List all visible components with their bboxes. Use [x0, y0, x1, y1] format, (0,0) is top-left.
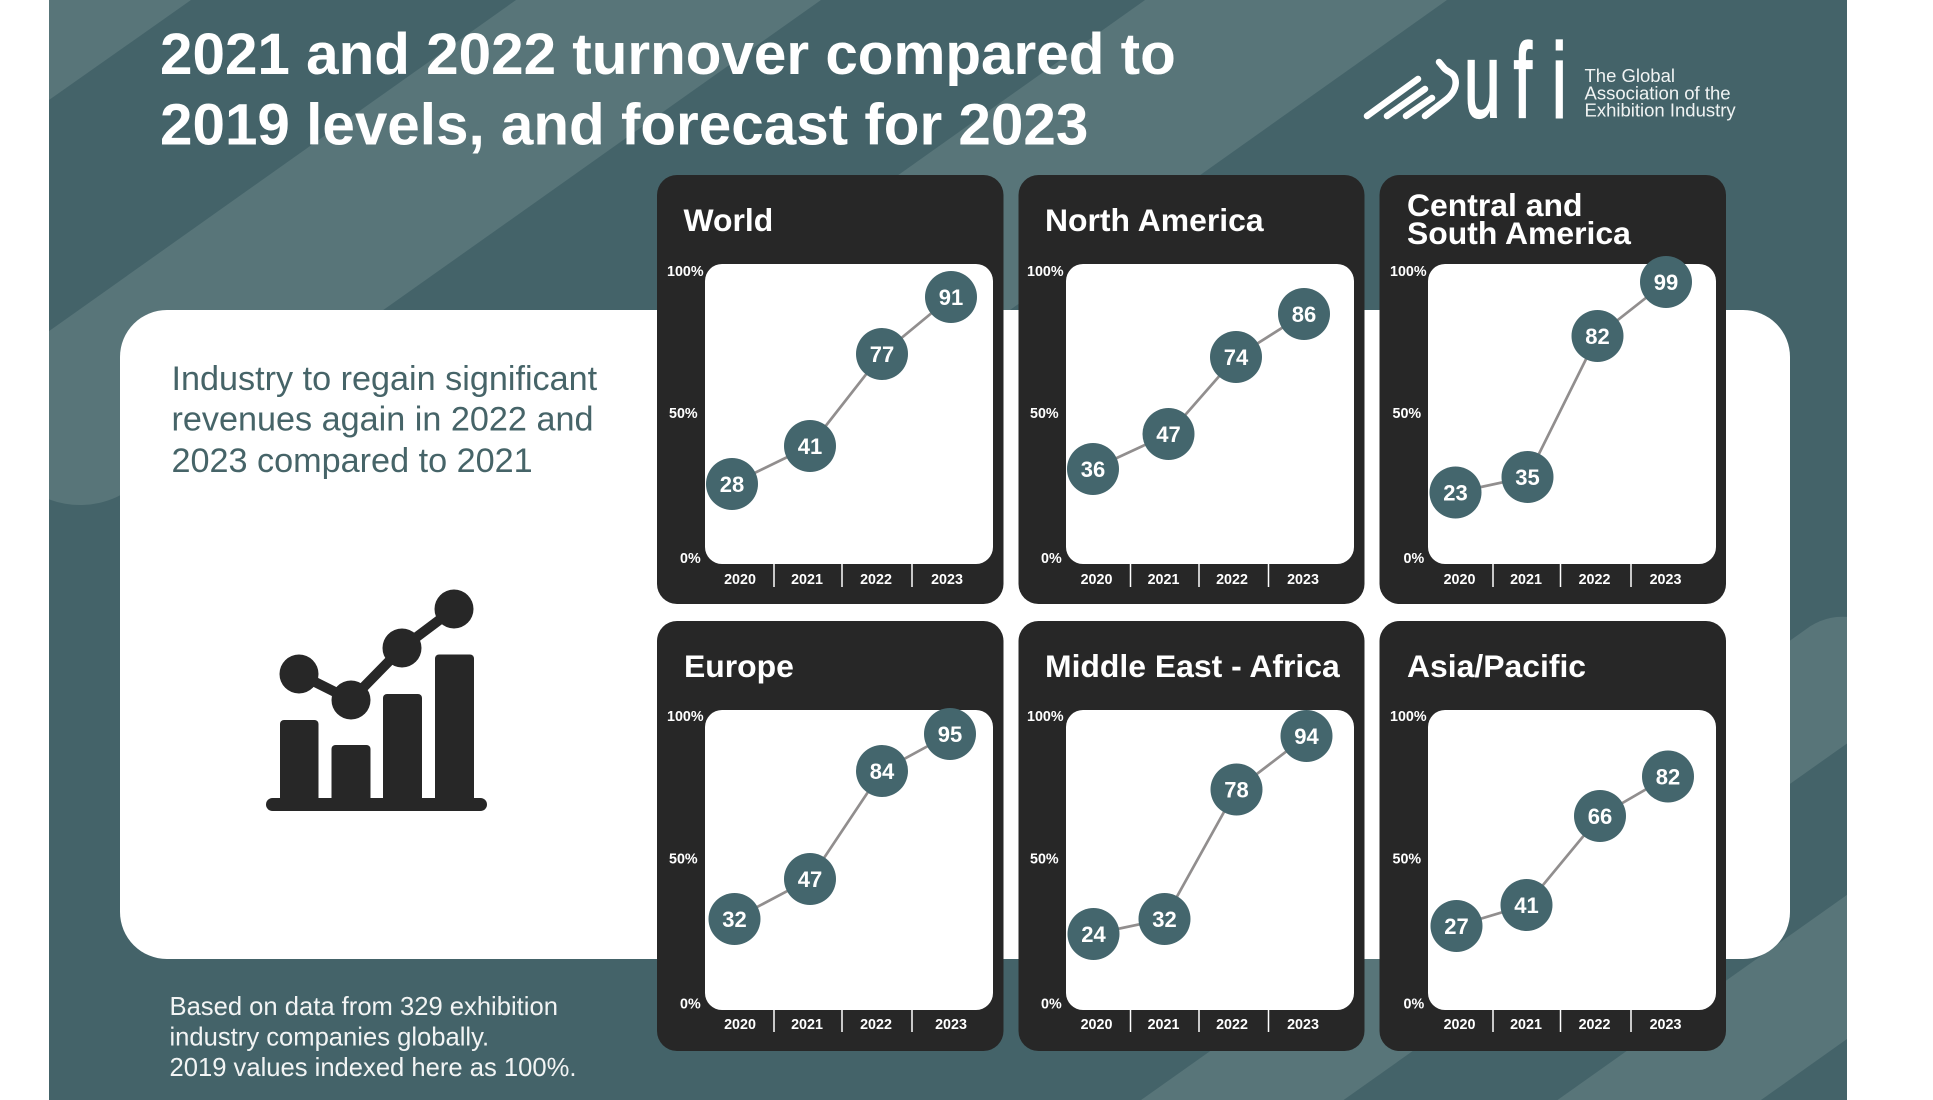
line chart: 41	[1514, 893, 1539, 918]
summary text: 2023 compared to 2021	[172, 442, 533, 480]
y axis labels: 100%	[1027, 709, 1064, 725]
line chart	[1068, 710, 1332, 960]
logo tagline: Association of the	[1584, 82, 1731, 103]
white content panel	[120, 310, 1790, 959]
y axis labels: 0%	[680, 996, 701, 1012]
y axis labels: 50%	[1392, 852, 1421, 868]
footnote: Based on data from 329 exhibition	[170, 993, 558, 1021]
y axis labels: 50%	[1392, 406, 1421, 422]
x axis labels	[1081, 1010, 1319, 1033]
x axis labels: 2023	[1650, 1017, 1681, 1033]
x axis labels	[724, 1010, 967, 1033]
y axis labels: 50%	[1030, 406, 1059, 422]
x axis labels	[1444, 1010, 1681, 1033]
x axis labels: 2021	[791, 572, 823, 588]
y axis labels	[667, 264, 704, 567]
x axis labels: 2022	[1216, 572, 1248, 588]
line chart: 74	[1224, 345, 1249, 370]
line chart: 32	[722, 907, 747, 932]
icon: bar chart with trend line	[266, 590, 487, 811]
y axis labels	[1027, 709, 1064, 1012]
line chart	[706, 271, 977, 510]
y axis labels	[1027, 264, 1064, 567]
footnote: 2019 values indexed here as 100%.	[170, 1054, 576, 1082]
x axis labels	[724, 564, 963, 588]
heading: Central and South America: South America	[1407, 215, 1631, 251]
x axis labels: 2020	[724, 572, 756, 588]
line chart: 66	[1588, 804, 1612, 829]
logo tagline: The Global	[1584, 65, 1675, 86]
y axis labels: 50%	[1030, 852, 1059, 868]
x axis labels: 2022	[1579, 572, 1610, 588]
panel: Europe	[657, 621, 1004, 1051]
y axis labels: 100%	[1390, 709, 1427, 725]
line chart	[1430, 750, 1694, 952]
y axis labels	[667, 709, 704, 1012]
line chart	[1067, 288, 1330, 495]
line chart: 24	[1081, 922, 1106, 947]
x axis labels: 2020	[1444, 1017, 1475, 1033]
y axis labels: 0%	[680, 551, 701, 567]
x axis labels: 2020	[724, 1017, 756, 1033]
title: 2019 levels, and forecast for 2023	[160, 92, 1088, 158]
x axis labels: 2023	[1650, 572, 1681, 588]
y axis labels: 0%	[1404, 996, 1424, 1012]
y axis labels	[1390, 264, 1427, 567]
x axis labels: 2022	[1579, 1017, 1610, 1033]
y axis labels: 0%	[1041, 551, 1062, 567]
x axis labels: 2021	[1148, 572, 1179, 588]
x axis labels	[1081, 564, 1319, 588]
line chart: 82	[1585, 324, 1610, 349]
summary text: Industry to regain significant	[172, 360, 598, 398]
x axis labels: 2023	[1287, 1017, 1319, 1033]
y axis labels: 100%	[667, 264, 704, 280]
x axis labels: 2022	[860, 572, 892, 588]
panel: North America	[1018, 175, 1364, 604]
y axis labels: 100%	[1390, 264, 1427, 280]
heading: North America: North America	[1045, 202, 1264, 238]
logo wordmark: ufi	[1464, 21, 1567, 140]
y axis labels: 100%	[1027, 264, 1064, 280]
line chart: 32	[1152, 907, 1177, 932]
icon: ufi logo swoosh	[1367, 62, 1456, 116]
heading: Asia/Pacific: Asia/Pacific	[1407, 648, 1586, 684]
x axis labels: 2023	[931, 572, 963, 588]
line chart	[708, 708, 976, 945]
panel: Central and South America	[1380, 175, 1726, 604]
y axis labels: 100%	[667, 709, 704, 725]
y axis labels	[1390, 709, 1427, 1012]
line chart: 41	[798, 434, 822, 459]
panel: Middle East - Africa	[1018, 621, 1364, 1051]
heading: Middle East - Africa: Middle East - Africa	[1045, 648, 1340, 684]
line chart: 84	[870, 759, 895, 784]
x axis labels: 2022	[860, 1017, 892, 1033]
y axis labels: 0%	[1404, 551, 1424, 567]
line chart	[1430, 256, 1692, 518]
footnote: industry companies globally.	[170, 1024, 489, 1052]
summary text: revenues again in 2022 and	[172, 400, 594, 438]
line chart: 95	[938, 722, 962, 747]
panel: Asia/Pacific	[1380, 621, 1726, 1051]
x axis labels: 2023	[1287, 572, 1319, 588]
line chart: 91	[939, 285, 963, 310]
line chart: 36	[1081, 457, 1105, 482]
x axis labels: 2020	[1444, 572, 1475, 588]
heading: World: World	[684, 202, 773, 238]
line chart: 82	[1656, 764, 1680, 790]
x axis labels: 2023	[935, 1017, 967, 1033]
x axis labels	[1444, 564, 1681, 588]
line chart: 23	[1443, 480, 1468, 506]
line chart: 27	[1444, 914, 1469, 939]
y axis labels: 50%	[669, 852, 698, 868]
line chart: 47	[1156, 422, 1181, 447]
line chart: 77	[870, 342, 894, 367]
line chart: 35	[1515, 465, 1540, 490]
title: 2021 and 2022 turnover compared to	[160, 22, 1176, 87]
line chart: 28	[720, 472, 744, 497]
logo tagline: Exhibition Industry	[1584, 100, 1736, 121]
x axis labels: 2021	[1510, 1017, 1542, 1033]
line chart: 47	[798, 867, 822, 892]
x axis labels: 2021	[791, 1017, 823, 1033]
y axis labels: 50%	[669, 406, 698, 422]
y axis labels: 0%	[1041, 996, 1062, 1012]
x axis labels: 2021	[1510, 572, 1542, 588]
x axis labels: 2022	[1216, 1017, 1248, 1033]
line chart: 99	[1654, 270, 1678, 295]
line chart: 94	[1294, 724, 1319, 749]
line chart: 86	[1292, 302, 1316, 327]
heading: Europe: Europe	[684, 648, 794, 684]
panel: World	[657, 175, 1004, 604]
UFI logo	[1367, 21, 1736, 140]
x axis labels: 2020	[1081, 572, 1112, 588]
x axis labels: 2020	[1081, 1017, 1112, 1033]
x axis labels: 2021	[1148, 1017, 1179, 1033]
line chart: 78	[1224, 778, 1249, 802]
heading: Central and South America: Central and	[1407, 187, 1582, 223]
